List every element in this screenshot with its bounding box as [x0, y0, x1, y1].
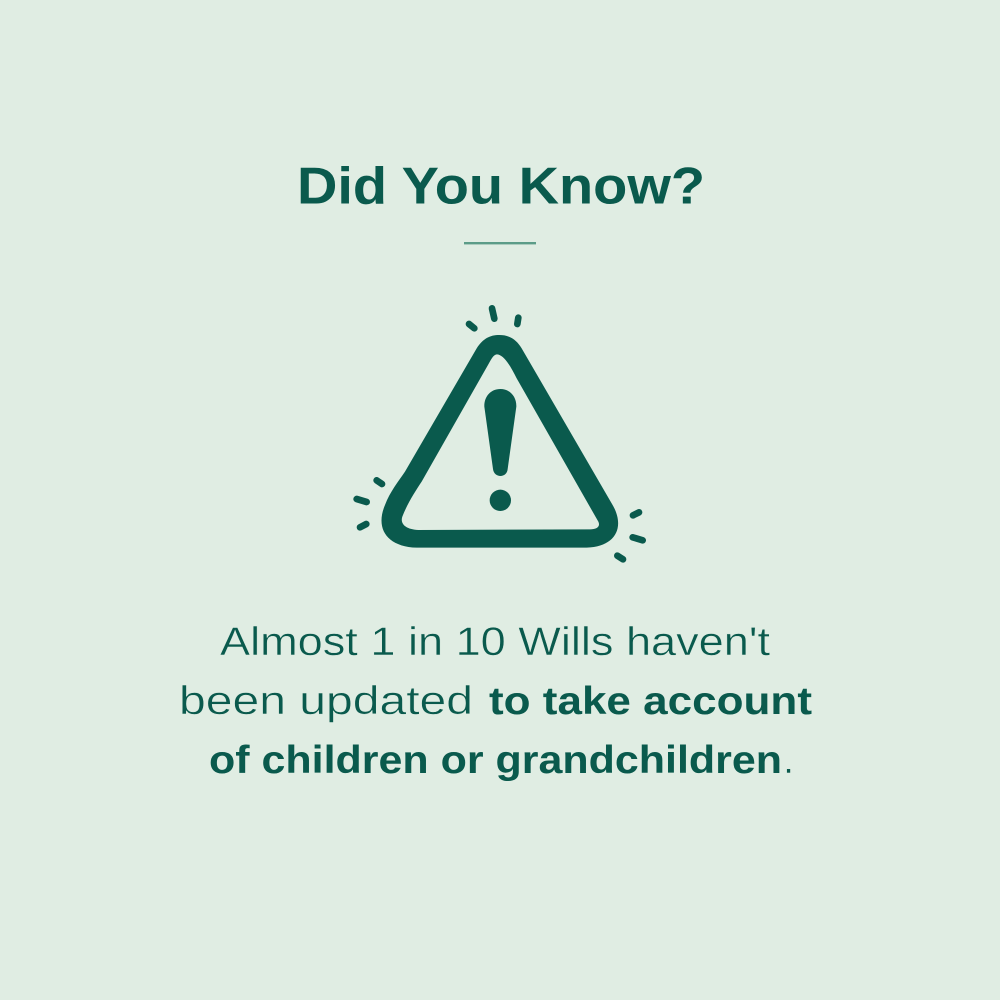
line 1: Almost 1 in 10 Wills haven't	[220, 620, 770, 664]
triangle outline	[381, 335, 618, 548]
title: Did You Know?	[297, 158, 705, 216]
line 2 regular: been updated	[179, 679, 473, 723]
title underline	[464, 242, 536, 244]
line 3 period: .	[783, 738, 794, 782]
body text	[179, 620, 812, 782]
icon: warning triangle with exclamation mark	[357, 308, 643, 559]
exclamation mark	[484, 389, 516, 511]
radiating ticks	[357, 308, 643, 559]
line 2 bold: to take account	[489, 680, 812, 723]
line 3 bold: of children or grandchildren	[209, 739, 782, 782]
